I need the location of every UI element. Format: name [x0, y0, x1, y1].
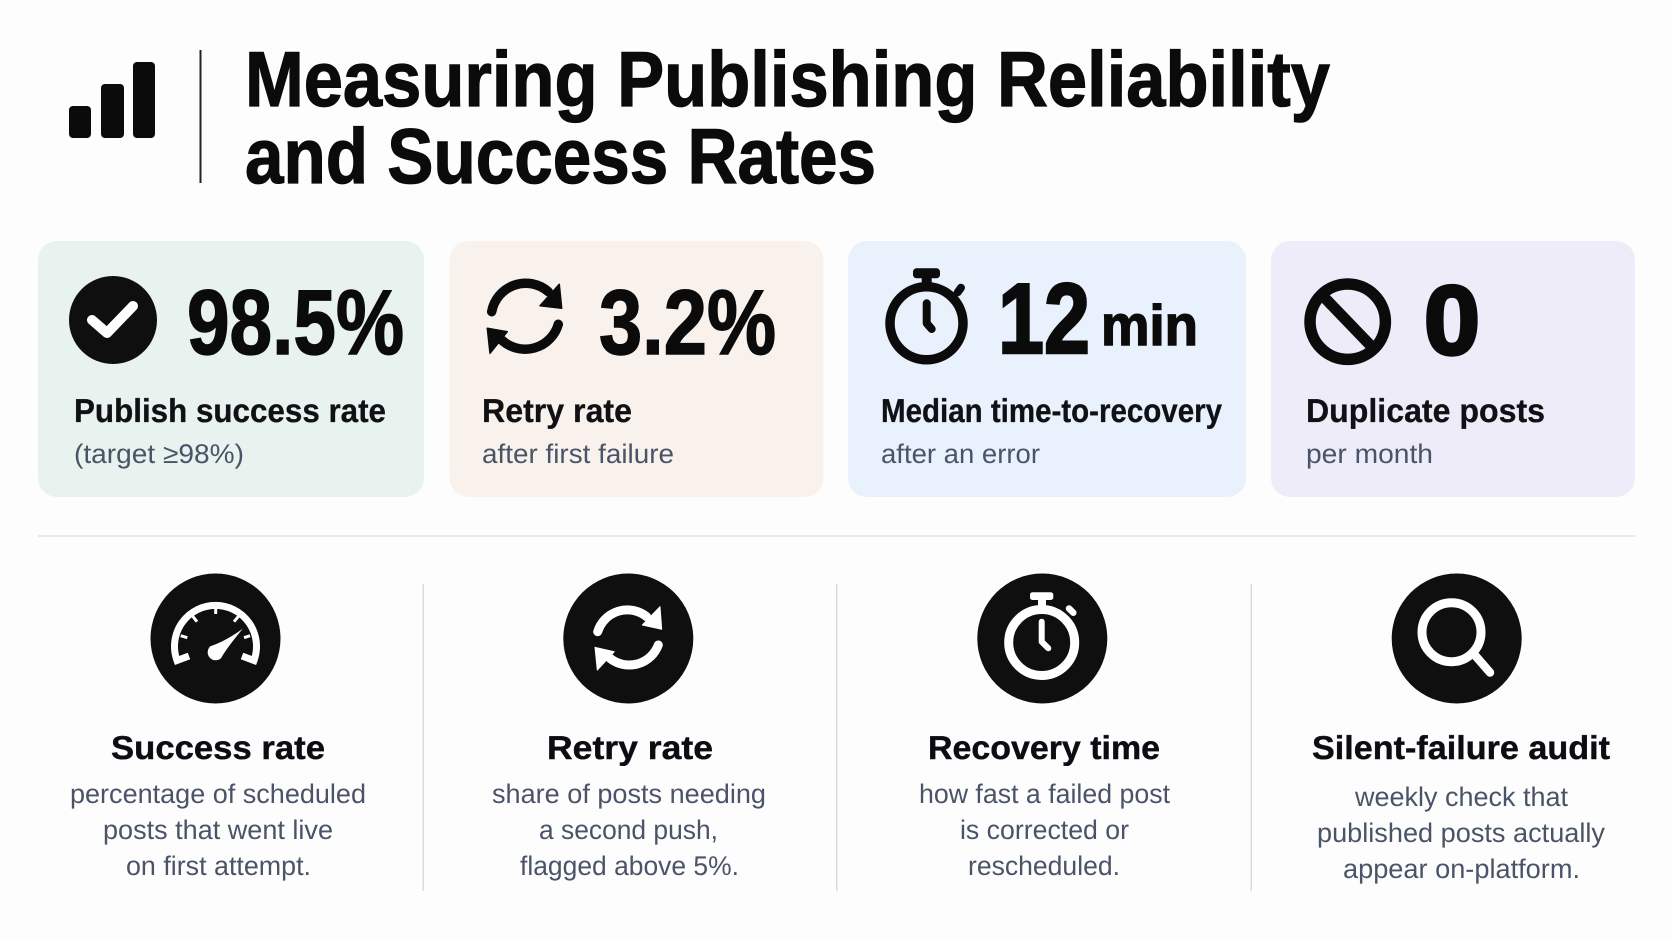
column: recovery time: [919, 574, 1170, 881]
description: a second push,: [539, 815, 718, 845]
metric label: Duplicate posts: [1306, 392, 1545, 429]
metric label: Median time-to-recovery: [881, 392, 1223, 429]
metric value: min: [1101, 294, 1198, 358]
icon: check circle: [69, 276, 157, 364]
panel: retry rate: [450, 241, 824, 497]
icon: refresh arrows: [487, 283, 562, 353]
icon: bar chart: [69, 62, 155, 138]
metric value: 0: [1424, 265, 1480, 375]
column: success rate: [70, 574, 366, 881]
icon: refresh: [563, 574, 693, 704]
metric value: 98.5%: [187, 272, 404, 374]
metric value: 12: [998, 263, 1090, 375]
icon: gauge: [150, 574, 280, 704]
description: posts that went live: [103, 815, 333, 845]
title: and Success Rates: [245, 112, 876, 200]
header: [69, 35, 1330, 200]
column: silent-failure audit: [1312, 574, 1610, 884]
description: share of posts needing: [492, 779, 766, 809]
description: percentage of scheduled: [70, 779, 366, 809]
icon: stopwatch: [977, 574, 1107, 704]
description: published posts actually: [1317, 818, 1605, 848]
heading: Recovery time: [928, 729, 1160, 766]
column: retry rate: [492, 574, 766, 881]
description: appear on-platform.: [1343, 854, 1580, 884]
description: [1317, 782, 1605, 884]
description: rescheduled.: [968, 851, 1120, 881]
metric label: Publish success rate: [74, 392, 386, 429]
metric value: [998, 263, 1198, 375]
panel: duplicate posts: [1271, 241, 1635, 497]
metric note: after first failure: [482, 439, 674, 469]
title: Measuring Publishing Reliability: [245, 35, 1330, 123]
description: on first attempt.: [126, 851, 311, 881]
description: how fast a failed post: [919, 779, 1170, 809]
title: [245, 35, 1330, 200]
description: [919, 779, 1170, 881]
icon: magnifier: [1392, 574, 1522, 704]
metric value: 3.2%: [599, 272, 776, 374]
metric note: after an error: [881, 439, 1040, 469]
heading: Silent-failure audit: [1312, 729, 1610, 766]
metric label: Retry rate: [482, 392, 632, 429]
description: is corrected or: [960, 815, 1129, 845]
description: weekly check that: [1354, 782, 1568, 812]
heading: Retry rate: [547, 729, 713, 766]
icon: stopwatch: [890, 268, 963, 360]
metric note: (target ≥98%): [74, 439, 244, 469]
panel: publish success rate: [38, 241, 424, 497]
heading: Success rate: [111, 729, 325, 766]
metric note: per month: [1306, 439, 1433, 469]
icon: prohibited: [1310, 284, 1385, 359]
description: [492, 779, 766, 881]
panel: median time-to-recovery: [848, 241, 1246, 497]
description: flagged above 5%.: [520, 851, 739, 881]
description: [70, 779, 366, 881]
